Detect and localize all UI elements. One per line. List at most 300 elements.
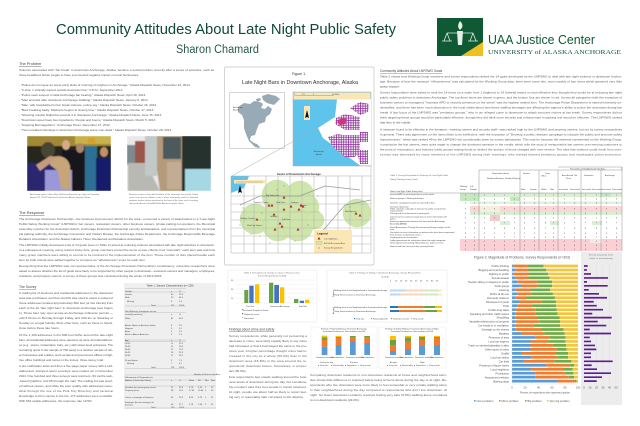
table 1: sample characteristics: 25 (211, 387, 214, 389)
purple bars (584, 266, 613, 381)
section: The Response: many group members were willing to commit to be involved in the implementation of the item. These number of dots placed beside each (19, 253, 215, 257)
table 2: rankings of late night public safety goals: Female (530, 189, 538, 191)
photo: boarded storefront on sidewalk: with local officials Photo/Bill Roth, Alaska Dispatch News (129, 202, 185, 205)
table 1: sample characteristics: 23.3 (179, 387, 184, 389)
table 2: rankings of late night public safety goals: 6855777658588788 (465, 237, 618, 239)
table 1: sample characteristics: Race/Ethnicity (categories are not (125, 310, 157, 313)
table 2: rankings of late night public safety goals: Increase APD or security presence on the street (390, 193, 435, 196)
table 1: sample characteristics: 39 (211, 404, 214, 406)
section: The Response: In a subsequent meeting, using colored sticky dots, group members scored the items on two criteria: how "important" each item was and how (19, 248, 216, 252)
problem labels: Trash on streets/sidewalks in alley (468, 344, 510, 348)
table 1: sample characteristics: 114 (171, 367, 175, 369)
chart: feelings of safety in downtown Anchorage: At night (332, 307, 335, 314)
table 1: sample characteristics: 18.1 (179, 355, 184, 357)
chart: feelings of safety in downtown Anchorage: 50 (415, 280, 418, 282)
table 2: rankings of late night public safety goals: 2234324342322443 (465, 198, 618, 200)
chart: safety by residency, daytime: Very unsafe (360, 365, 371, 367)
section: Community Attitudes About LNPSWG Goals: service was dismissed by many members of the LNPSWG during their meetings, who instead blamed predatory groups and inadequate police protection. (380, 152, 622, 156)
table 1: sample characteristics: % (179, 314, 181, 316)
chart: perceptions of change in crime: Downtown Anchorage (270, 305, 290, 308)
legend: Very big problem (550, 399, 570, 403)
problem labels: Begging and panhandling (478, 268, 509, 272)
chart: feelings of safety in downtown Anchorage: 60 (420, 280, 423, 282)
chart: perceptions of change in crime: 30 (231, 289, 234, 291)
chart: safety by residency, daytime: Downtown residents (346, 356, 364, 359)
table 2: rankings of late night public safety goals: 9999999999999999 (465, 249, 618, 251)
section: The Survey: close before these late hours. (19, 326, 60, 330)
section: The Survey: what through the use of the Polk City Directory and personal (19, 389, 113, 393)
table 1: sample characteristics: 11.9 (179, 343, 184, 345)
chart: safety by residency, daytime: Very safe (320, 365, 329, 367)
chart: safety by residency, daytime: During the day (320, 361, 333, 364)
author: Sharon Chamard (176, 44, 259, 56)
section: Community Attitudes About LNPSWG Goals: derstaffed, and there has been much discussion in the local media about how these staffing shortages are affecting the agency's ability to police the downtown during bar (380, 106, 622, 110)
regional map: Anchorage: 0 (294, 94, 296, 96)
table 1: sample characteristics: 9.25 (198, 397, 203, 399)
downtown map with bars, buffers and respondents: Mad Myrna's (345, 211, 356, 213)
chart: perceptions of change in crime: Decreased (244, 318, 254, 320)
photo: police and crowd at bar break: August 23, 2013 Photo/Justin Hickman, Alaska Dispatch News (30, 196, 91, 199)
table 1: sample characteristics: 7 (171, 363, 173, 365)
table 2: rankings of late night public safety goals: 9888888888888888 (465, 245, 618, 247)
table 2: rankings of late night public safety goals: 7888888878788888 (465, 228, 618, 230)
table 2: rankings of late night public safety goals: Use better to share information on patrons who have been trespassed (390, 231, 455, 234)
chart: safety by residency, night: Very safe (389, 365, 398, 367)
problem labels: Public drug sales (489, 308, 510, 312)
table 2: rankings of late night public safety goals: Increased (559, 189, 568, 191)
section: Findings about crime and safety: creased in the city as a whole (59.0%) than in the (229, 354, 307, 358)
map legend: 800' Buffer around Bars (324, 243, 345, 245)
table 2: rankings of late night public safety goals: Safety Working Group Goals (390, 178, 419, 181)
chart: feelings of safety in downtown Anchorage: Somewhat unsafe (393, 318, 410, 320)
problem labels: Domestic violence (487, 296, 509, 300)
panel: percent answering don't know: 20 (595, 386, 598, 390)
panel: percent answering don't know: 40 (608, 386, 611, 390)
panel: percent answering don't know: Know" or not answering (589, 257, 613, 260)
table 1: sample characteristics: 21 (171, 346, 174, 348)
problem labels: Loud car radios (490, 356, 510, 360)
table 1: sample characteristics: Total (151, 406, 156, 409)
problem labels: Presence of liquor stores (479, 363, 510, 367)
axis and title (511, 264, 581, 394)
chart: perceptions of change in crime: This Year (246, 306, 255, 308)
section: The Problem: - "Man arrested after downtown Anchorage stabbing," Alaska Dispatch News, January 8, 2014 (19, 98, 148, 102)
table 1: sample characteristics: 52 (171, 297, 174, 299)
table 1: sample characteristics: 6 (171, 325, 173, 327)
table 1: sample characteristics: Hispanic (125, 328, 133, 330)
table 2: rankings of late night public safety goals: area (390, 228, 395, 231)
chart: safety by residency, daytime: Downtown residents (316, 356, 334, 359)
table 2: rankings of late night public safety goals: Increased (582, 189, 591, 191)
table 2: rankings of late night public safety goals: Lobby government for restrictions about late night navigation (390, 239, 447, 242)
axis and title: 80 (564, 386, 567, 390)
chart: safety by residency, night: Reasonably (402, 365, 413, 367)
photo: boarded storefront on sidewalk (127, 136, 211, 205)
section: The Survey: ed without names, and while the poor quality was addressed some- (19, 384, 113, 388)
table 1: sample characteristics: 3 (171, 334, 173, 336)
section: The Survey: Of the 1,100 addresses in the 800-foot buffer around the late-night (19, 333, 113, 337)
table 1: sample characteristics: 4 (171, 301, 173, 303)
table 2: rankings of late night public safety goals: 5566666656566566 (465, 218, 618, 220)
section: The Problem: those headlined below, began to have a perceived negative impact on local businesses. (19, 73, 139, 77)
table 1: sample characteristics: 44 (171, 404, 174, 406)
chart: feelings of safety in downtown Anchorage: 10 (395, 280, 398, 282)
problem labels: Abandoned vehicles (485, 375, 510, 379)
table 2: rankings of late night public safety goals: Anchorage (605, 174, 616, 177)
chart: perceptions of change in crime: Stayed the same (244, 313, 260, 316)
section: Community Attitudes About LNPSWG Goals: Table 2 shows how Working Group members and survey respondents ranked the 14 goals developed by the LNPSWG to deal with late night violence in downtown Anchor- (380, 74, 622, 78)
inset map: North America: Anchorage (233, 106, 244, 109)
table 1: sample characteristics: 5 (171, 331, 173, 333)
chart: safety by residency, daytime: Somewhat (347, 364, 357, 367)
section: Community Attitudes About LNPSWG Goals: in general. There was agreement on the items likely to be ineffective, with the exception of "Develop a public relations campaign to educate the public and promote safety (380, 132, 622, 136)
section: The Response: Retailers Association, and the Alaska Cabaret, Hotel, Restaurant and Retailers Association. (19, 237, 144, 241)
table 1: sample characteristics: 1 (205, 390, 207, 392)
table 1: sample characteristics: Address (Ownership Status) (125, 379, 151, 382)
section: Findings about crime and safety: downtown area (46.8%) or the area around the re- (229, 359, 307, 363)
section: The Problem: The Problem (19, 61, 41, 66)
chart: safety by residency, night: Downtown residents (415, 356, 433, 359)
section: The Survey: With 534 usable addresses, the response rate 19.5%. (19, 399, 93, 403)
section: Community Attitudes About LNPSWG Goals: business owners or managers) "Increase APD or security presence on the street" was the highest ranked item. The Anchorage Police Department is indeed extremely un- (380, 100, 622, 104)
table 2: rankings of late night public safety goals: police (390, 218, 396, 220)
section: The Problem: - "Shooting outside Nightclub wounds 3 in downtown Anchorage," Alaska Dispatch News, June 15, 2013 (19, 113, 162, 117)
table 1: sample characteristics: 159 (171, 407, 175, 409)
section: The Survey: 2014. One hundred and three surveys were returned—54 via the web- (19, 374, 113, 378)
title: Community Attitudes About Late Night Public Safety (56, 22, 397, 38)
section: The Survey: area was purchased, and then ArcGIS was used to select a subset of (19, 296, 113, 300)
chart: feelings of safety in downtown Anchorage: Walking alone in the Neighborhood in Downtown Anchorage (334, 306, 388, 309)
table 2 cell highlights (460, 193, 622, 251)
chart: perceptions of change in crime: Bar/Club (299, 306, 308, 308)
text: residents comparison: night, far fewer downtown residents reported feeling very safe (6.8%) walking alone compared (310, 393, 447, 397)
section: The Survey: 1). These bars may open as late as Anchorage ordinance permits — (19, 311, 114, 315)
map legend: Legend (317, 232, 328, 236)
figure 1: map panel: Figure 1. (292, 72, 306, 76)
table 2: rankings of late night public safety goals (390, 167, 622, 251)
chart: feelings of safety in downtown Anchorage: 70 (426, 280, 429, 282)
table 1: sample characteristics: 37 (171, 387, 174, 389)
regional map: Anchorage: 10 Miles (332, 94, 339, 96)
problem labels: Graffiti (501, 352, 509, 356)
chart: feelings of safety in downtown Anchorage: Daytime (332, 289, 335, 297)
table 1: sample characteristics: Relationship of Respondent to (125, 376, 154, 379)
table 2: rankings of late night public safety goals: Assembly (ARBA) (390, 222, 407, 226)
table 2: rankings of late night public safety goals: Keep the campaign focused security staff at bars (390, 201, 435, 204)
chart: feelings of safety in downtown Anchorage: 40 (410, 280, 413, 282)
table 1: sample characteristics: 8.55 (189, 397, 194, 399)
table 1: sample characteristics: 5.78 (189, 404, 194, 406)
problem labels: Loitering (499, 288, 510, 292)
problem labels: Barking dogs (493, 379, 510, 383)
downtown map with bars, buffers and respondents: Club Paris (276, 202, 285, 204)
table 2: rankings of late night public safety goals: 9999987899888999 (465, 208, 618, 210)
section: The Response: pal parking authority, the Anchorage Convention and Visitors Bureau, the Anchorage Police Department, the Anchorage Responsible Beverage (19, 232, 215, 236)
table 1: sample characteristics: Min (205, 380, 209, 382)
problem labels: Car theft (499, 360, 509, 364)
section: Findings about crime and safety: Survey respondents, while generally not perceiving a (229, 334, 307, 338)
section: The Response: residents, and property owners. A survey of these groups was conducted during the winter of 2014-2015. (19, 274, 162, 278)
chart: safety by residency, daytime: Feelings of Safety Walking in Downtown Anchorage, (321, 328, 368, 330)
regional map: Anchorage: Alaska (316, 153, 323, 156)
table 1: sample characteristics: 65 (171, 294, 174, 296)
section: The Survey: knowledge to fill in names in the list, 173 addresses were unusable. (19, 394, 113, 398)
chart: feelings of safety in downtown Anchorage: 20 (400, 280, 403, 282)
table 2: rankings of late night public safety goals: 6677776787677777 (465, 222, 618, 224)
problem labels: Garbage on the streets (482, 328, 510, 332)
photo: police and crowd at bar break (27, 136, 111, 199)
table 1: sample characteristics: 46-55 (125, 352, 131, 354)
table 1: sample characteristics: 3.4 (179, 301, 183, 303)
section: The Response: The Anchorage Downtown Partnership—the business improvement district for the area—convened a variety of stakeholders in a "Late Night (19, 217, 215, 221)
table 2: rankings of late night public safety goals: Resident (505, 177, 513, 180)
section: Findings about crime and safety: ing very or reasonably safe compared to the daytime. (229, 395, 304, 399)
table 1: sample characteristics: 80.2 (179, 318, 184, 320)
text: residents comparison (310, 373, 447, 402)
chart: perceptions of change in crime (228, 270, 317, 322)
table 1: sample characteristics: Total (151, 366, 156, 369)
section: The Response: asked to assess whether the list of goals were likely to be supported by other people in downtown—business owners and managers, employees, (19, 269, 215, 273)
table 1: sample characteristics: 25.2 (179, 397, 184, 399)
chart: safety by residency, night: Downtown residents (385, 356, 403, 359)
downtown map with bars, buffers and respondents: Gaslight (270, 215, 278, 218)
section: The Response: The LNPSWG initially developed a list of 14 goals (seen in Table 2) aimed at reducing violence associated with late night activities in downtown. (19, 243, 215, 247)
legend: Minor problem (502, 399, 519, 403)
table 1: sample characteristics: Total (151, 304, 156, 307)
table 1: sample characteristics: n (171, 314, 173, 316)
regional map: Anchorage: Anchorage (314, 150, 325, 153)
table 2: rankings of late night public safety goals: Decreased (592, 189, 602, 191)
figure 2: magnitude of problems: Figure 2. Magnitude of Problems, Survey Respondents (n=303) (474, 256, 570, 260)
map legend: Survey Respondents (324, 246, 343, 250)
panel: percent answering don't know (581, 252, 622, 405)
problem labels: Disrespect of youth (486, 300, 509, 304)
problem labels: Other types of noise (485, 348, 509, 352)
axis and title: 100 (576, 386, 581, 390)
table 1: sample characteristics: 55.6 (179, 294, 184, 296)
map title: Heart of Downtown Anchorage: Heart of Downtown Anchorage (277, 172, 321, 176)
inset map: North America: Alaska (233, 108, 240, 112)
section: The Survey: those addresses located approximately 800 feet (or two blocks) from (19, 301, 113, 305)
table 2: rankings of late night public safety goals: Office (541, 176, 547, 178)
section: Community Attitudes About LNPSWG Goals: Community Attitudes About LNPSWG Goals (380, 69, 443, 73)
section: Community Attitudes About LNPSWG Goals: Survey respondents were asked to rank the 14 items on a scale from 1 (highest) to 14 (lowest) based on how effective they thought they would be at reducing late night (380, 90, 622, 94)
table 1: sample characteristics: 7.84 (198, 404, 203, 406)
table 2: rankings of late night public safety goals: Male (521, 189, 526, 191)
section: Findings about crime and safety: decrease in crime, were fairly equally likely to say crime (229, 339, 307, 343)
table 1: sample characteristics: 17 (171, 355, 174, 357)
section: Findings about crime and safety: ness areas of downtown during the day, but considera- (229, 380, 307, 384)
panel: percent answering don't know: 10 (588, 386, 592, 390)
table 2: rankings of late night public safety goals: Business (496, 178, 504, 180)
section: The Response: The Response (19, 210, 44, 215)
table 1: sample characteristics: 27.7 (179, 404, 184, 406)
table 2: rankings of late night public safety goals: Voluntary agreements between the bars and the Anchorage (390, 220, 446, 223)
chart: safety by residency, daytime: Day time (350, 361, 359, 364)
photo: boarded storefront on sidewalk: used a stun gun to subdue a man. Owner of property said he's boarded (129, 196, 199, 199)
table 1: sample characteristics: % (179, 340, 181, 342)
chart: perceptions of change in crime: Table 3. Perceptions of Change in Crime in Previous Year, (244, 272, 300, 274)
section: Findings about crime and safety: had increased or that it had stayed the same in the pre- (229, 344, 307, 348)
table 2: rankings of late night public safety goals: Loading zones for taxi parkers (390, 236, 418, 239)
table 1: sample characteristics: 1 (205, 404, 207, 406)
connector lines between maps (232, 128, 371, 176)
downtown map with bars, buffers and respondents: Big Timber Bar (266, 195, 280, 197)
section: The Problem: - "3 shot, 1 critically injured outside downtown bar," KTUU, September 2014 (19, 88, 123, 92)
chart: safety by residency, night: Somewhat (416, 364, 426, 367)
section: Community Attitudes About LNPSWG Goals: the point of intoxication, and industry lobby groups raising funds to defend the actions of those charged with over-service. The idea that violence could result from over- (380, 148, 622, 152)
table 2: rankings of late night public safety goals: Years (545, 173, 550, 175)
table 2: rankings of late night public safety goals: Table 2. Survey Respondents' Rankings of Late Night Public (390, 174, 449, 177)
section: Findings about crime and safety: At night, people are about half as likely to report feel- (229, 390, 307, 394)
chart: safety by residency, night (379, 327, 446, 368)
table 2: rankings of late night public safety goals: Connect to bars and encourage bars to share information with (390, 216, 448, 218)
chart: feelings of safety in downtown Anchorage: 90 (436, 280, 439, 282)
table 1: sample characteristics: Table 1. Sample Characteristics (n= 159) (147, 284, 194, 288)
section: Findings about crime and safety: Findings about crime and safety (229, 328, 275, 332)
table 2: rankings of late night public safety goals: Decreased (570, 189, 580, 191)
table 1: sample characteristics: 81 (171, 318, 174, 320)
problem labels: Car break-in or vandalism (478, 324, 510, 328)
photo: boarded storefront on sidewalk: windows broken during weekend at the front of the store and is working (129, 199, 199, 202)
table 2: rankings of late night public safety goals: from the bars or downtown stores (390, 234, 421, 236)
table 1: sample characteristics: 26 (171, 352, 174, 354)
table 1: sample characteristics: Black or African American (125, 333, 150, 336)
table 1: sample characteristics: 100.0 (179, 407, 185, 409)
table 2: rankings of late night public safety goals: Reduce bad late hours past last serving alcohol (390, 245, 434, 248)
table 1: sample characteristics: 5 (171, 328, 173, 330)
downtown map with bars, buffers and respondents: Pioneer (300, 205, 307, 207)
table 1: sample characteristics: 22.8 (179, 352, 184, 354)
text: residents comparison: to non-downtown residents (22.2%). (310, 398, 360, 402)
chart: feelings of safety in downtown Anchorage: 30 (405, 280, 408, 282)
section: The Problem: - "Man, wife hospitalized in bar break violence, police say," Alaska Dispatch News, October 16, 2013 (19, 103, 156, 107)
text: residents comparison: ities shows little difference in reported safety being at home alone during the day or at night. Re- (310, 378, 447, 382)
table 1: sample characteristics (124, 283, 221, 409)
section: The Survey: er businesses and entities, such as law and government offices in high- (19, 353, 113, 357)
problem labels: Loud neighbors (490, 367, 510, 371)
chart: safety by residency, night: Non-downtown (400, 356, 413, 359)
problem labels (468, 264, 510, 383)
table 1: sample characteristics: 4.1 (179, 328, 183, 330)
section: Community Attitudes About LNPSWG Goals: break. A fact focus of the LNPSWG was "predatory groups," who in our alleged come to downtown to attack innocent victims at bar break. Survey respondents did not (380, 110, 622, 114)
table 2: rankings of late night public safety goals: With (550, 188, 554, 191)
table 1: sample characteristics: Age (125, 339, 130, 342)
section: Community Attitudes About LNPSWG Goals: that item in the middle. (380, 120, 411, 124)
table 2: rankings of late night public safety goals: Other approval for parking "Metal detector" policies in bars (390, 242, 444, 244)
panel: percent answering don't know: Percent answering "Don't (589, 254, 614, 256)
problem labels: Shoplifting (496, 316, 509, 320)
section: Community Attitudes About LNPSWG Goals: improvements," which was ranked #9 by the LNPSWG but considerably lower by survey participants. This may be because the interests represented on the Working Group, (380, 138, 622, 142)
table 1: sample characteristics: 7.9 (179, 360, 183, 362)
axis and title: 60 (550, 386, 554, 390)
chart: feelings of safety in downtown Anchorage: Using Street locations in Downtown Anchorage (334, 310, 376, 313)
section: Findings about crime and safety: vious year. A higher percentage thought crime had in- (229, 349, 307, 353)
table 1: sample characteristics: Missing (127, 363, 135, 365)
problem labels: Public at ab use (490, 292, 510, 296)
chart: safety by residency, daytime (311, 327, 377, 368)
regional map: Anchorage: 5 (313, 94, 315, 96)
table 1: sample characteristics: n (171, 291, 173, 293)
photo: boarded storefront on sidewalk: Business owners clean left the block of the shootings last month. Police (129, 193, 199, 196)
chart: feelings of safety in downtown Anchorage: 80 (431, 280, 434, 282)
problem labels: Sexual assault (492, 276, 509, 280)
section: The Response (19, 210, 216, 278)
table 2: rankings of late night public safety goals: Group (460, 189, 466, 191)
table 2: rankings of late night public safety goals: Public relations campaign to educate the public and promote (390, 208, 447, 211)
chart: perceptions of change in crime: Increased/ Stayed the Same (243, 309, 269, 312)
table 1: sample characteristics: 3.49 (198, 387, 203, 389)
section: The Problem: - "Police seek suspect in fatal Anchorage bar beating," Alaska Dispatch News, April 18, 2014 (19, 93, 146, 97)
table 2: rankings of late night public safety goals: 8753555264656655 (465, 233, 618, 235)
table 2: rankings of late night public safety goals: Area Around The (562, 174, 578, 177)
legend (474, 399, 570, 403)
problem labels: Fighting in public (489, 272, 510, 276)
problem labels: People sitting or sleeping in public (468, 280, 510, 284)
axis and title: Percent of respondents who expressed opinion (520, 392, 571, 394)
table 2: rankings of late night public safety goals: Driving in downtown (390, 206, 409, 208)
table 2: rankings of late night public safety goals: Respondent Status (492, 172, 509, 175)
table 1: sample characteristics: 1.3 (179, 334, 183, 336)
table 2: rankings of late night public safety goals: Sample (470, 189, 478, 191)
section: The Response: Recognizing that the LNPSWG was not representative of the Anchorage Downtown Partnership's constituency, university researchers were (19, 264, 215, 268)
axis and title: 0 (511, 386, 513, 390)
table 1: sample characteristics: Owner or manager of business (125, 396, 153, 399)
section: Community Attitudes About LNPSWG Goals: A measure found to be effective in the literature—training owners and security staff—was ranked high by the LNPSWG and property owners, but not by survey respondents (380, 128, 622, 132)
table 1: sample characteristics: n (171, 340, 173, 342)
table 1: sample characteristics: 18.4 (179, 346, 184, 348)
table 1: sample characteristics: business (125, 404, 133, 406)
table 1: sample characteristics: 6.1 (179, 363, 183, 365)
section: The Problem: - "Two unrelated shootings in downtown Anchorage leave man dead," Alaska Dispatch News, October 28, 2012 (19, 128, 171, 132)
table 1: sample characteristics: 5.0 (179, 325, 183, 327)
table 1: sample characteristics: 18-25 (125, 343, 131, 345)
chart: safety by residency, night: Non-downtown (430, 356, 443, 359)
section: Community Attitudes About LNPSWG Goals: group support. (380, 84, 400, 88)
text: residents comparison: Comparing downtown residents to non-downtown residents at home and neighborhood activ- (310, 373, 447, 377)
table 1: sample characteristics: 40 (171, 397, 174, 399)
section: The Survey: -based Qualtrics, and 65 through the mail. The mailing list was proof- (19, 379, 113, 383)
problem labels: Burglary (499, 332, 510, 336)
table 1: sample characteristics: % (179, 380, 181, 382)
table 1: sample characteristics: 1 (205, 387, 207, 389)
section: Findings about crime and safety: spondents' downtown homes, businesses, or proper- (229, 364, 307, 368)
problem labels: Public drinking (492, 264, 509, 268)
table 2: rankings of late night public safety goals: 8999999999999999 (465, 241, 618, 243)
table 1: sample characteristics: 100.0 (179, 367, 185, 369)
chart: feelings of safety in downtown Anchorage: Using Street locations in Downtown Anchorage (334, 294, 376, 296)
photo: police and crowd at bar break: Anchorage police officer Marc McDonnell breaks up a fight on Saturday (30, 193, 100, 196)
table 2: rankings of late night public safety goals: Gender (523, 173, 530, 175)
table 2: rankings of late night public safety goals: 4445454545554545 (465, 213, 618, 215)
chart: perceptions of change in crime: 50 (231, 280, 234, 282)
axis and title: 40 (537, 386, 540, 390)
table 2: rankings of late night public safety goals: Parking and lot enforcement in parking lots (390, 212, 429, 215)
section: Findings about crime and safety: ble numbers said they feel unsafe in transit locations. (229, 385, 307, 389)
table 1: sample characteristics: Asian (125, 330, 131, 333)
chart: safety by residency, night: At night (390, 361, 397, 364)
section: The Survey: each of the 16 "late night bars" in downtown Anchorage (see Figure (19, 306, 113, 310)
problem labels: Loud car engines (488, 340, 510, 344)
section: The Survey: remaining spots in the sample of 700 were) to a random sample of oth- (19, 348, 113, 352)
chart: safety by residency, daytime: Reasonably (333, 365, 344, 367)
table 1: sample characteristics: 3.3 (179, 331, 183, 333)
table 1: sample characteristics: Mean (189, 380, 195, 382)
section: The Survey: The Survey (19, 285, 37, 289)
table 1: sample characteristics: % (179, 291, 181, 293)
section: The Survey: until 2:30 am on Monday through Friday, and 3:00 am on Saturday or (19, 316, 113, 320)
chart: safety by residency, night: Night (420, 361, 425, 364)
